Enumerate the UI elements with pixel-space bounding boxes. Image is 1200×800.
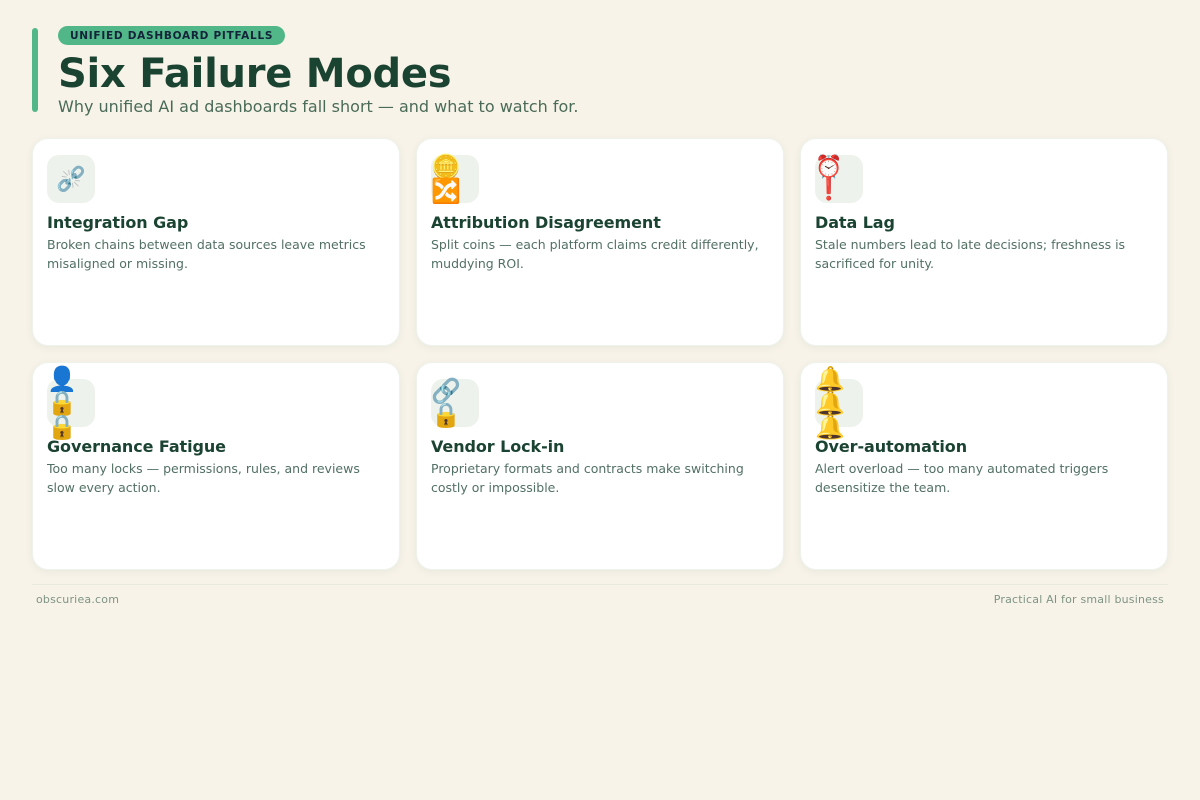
icon: link and lock: 🔗🔒: [431, 377, 461, 429]
heading: Attribution Disagreement: Attribution Disagreement: [431, 213, 661, 232]
text: Over-automation description: Alert overload — too many automated triggers desensitize the team.: [815, 461, 1108, 495]
heading: Integration Gap: Integration Gap: [47, 213, 188, 232]
badge: UNIFIED DASHBOARD PITFALLS: [70, 30, 273, 42]
panel: Over-automation: [800, 362, 1168, 570]
heading: Data Lag: Data Lag: [815, 213, 895, 232]
icon: alarm clock and exclamation: ⏰❗: [815, 155, 842, 202]
subtitle: Why unified AI ad dashboards fall short — and what to watch for.: [58, 97, 578, 116]
text: Vendor Lock-in description: Proprietary formats and contracts make switching costly or impossible.: [431, 461, 744, 495]
text: Governance Fatigue description: Too many locks — permissions, rules, and reviews slow every action.: [47, 461, 360, 495]
icon: coin and shuffle: 🪙🔀: [431, 153, 461, 205]
heading: Vendor Lock-in: Vendor Lock-in: [431, 437, 564, 456]
panel: Vendor Lock-in: [416, 362, 784, 570]
text: Integration Gap description: Broken chains between data sources leave metrics misaligned or missing.: [47, 237, 366, 271]
title: Six Failure Modes: [58, 51, 451, 97]
panel: Data Lag: [800, 138, 1168, 346]
footer: tagline: Practical AI for small business: [994, 593, 1164, 606]
panel: Attribution Disagreement: [416, 138, 784, 346]
panel: Governance Fatigue: [32, 362, 400, 570]
icon: person and locks: 👤🔒🔒: [47, 365, 77, 441]
icon: three bells: 🔔🔔🔔: [815, 365, 845, 441]
icon: three bells: [815, 379, 863, 427]
panel: Integration Gap: [32, 138, 400, 346]
heading: Over-automation: Over-automation: [815, 437, 967, 456]
accent bar: [32, 28, 38, 112]
badge: [58, 26, 285, 45]
footer: site name: obscuriea.com: [36, 593, 119, 606]
heading: Governance Fatigue: Governance Fatigue: [47, 437, 226, 456]
text: Data Lag description: Stale numbers lead to late decisions; freshness is sacrificed for unity.: [815, 237, 1125, 271]
icon: alarm clock and exclamation: [815, 155, 863, 203]
text: Attribution Disagreement description: Split coins — each platform claims credit differently, muddying ROI.: [431, 237, 759, 271]
icon: broken chain: ⛓️‍💥: [56, 165, 86, 193]
icon: broken chain: [47, 155, 95, 203]
icon: coin and shuffle: [431, 155, 479, 203]
icon: link and lock: [431, 379, 479, 427]
icon: person and locks: [47, 379, 95, 427]
